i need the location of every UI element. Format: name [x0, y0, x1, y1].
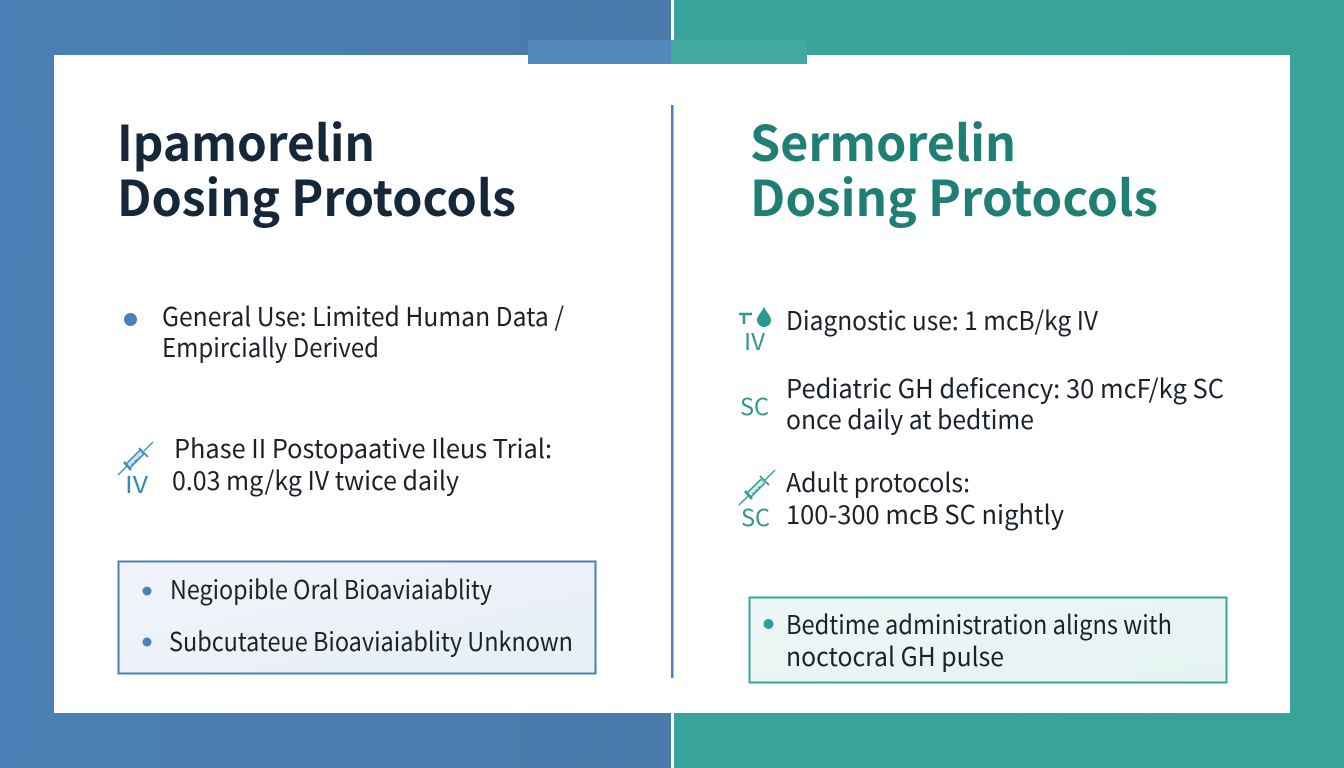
icon: IV drip and drop: IV: [744, 323, 766, 357]
item: diagnostic use: Diagnostic use: 1 mcB/kg IV: [786, 301, 1098, 338]
heading: Ipamorelin: Ipamorelin: [117, 105, 375, 176]
icon: SC label: SC: [740, 388, 769, 422]
item: Phase II trial: [172, 429, 552, 498]
heading: Sermorelin: Dosing Protocols: [750, 160, 1158, 231]
item: general use: Empircially Derived: [162, 328, 379, 365]
heading: Sermorelin: [750, 105, 1158, 231]
callout: bioavailability: Negiopible Oral Bioaviaiablity: [170, 570, 492, 607]
icon: IV drip and drop: [739, 307, 771, 357]
item: general use: [124, 297, 564, 365]
heading: Ipamorelin: [117, 105, 516, 231]
panel: Ipamorelin: [117, 105, 596, 674]
item: pediatric GH deficiency: Pediatric GH deficency: 30 mcF/kg SC: [786, 369, 1224, 406]
icon: syringe SC: [739, 470, 775, 533]
item: adult protocols: [786, 463, 1064, 532]
panel: Sermorelin: [739, 105, 1226, 682]
heading: Sermorelin: Sermorelin: [750, 105, 1016, 176]
callout: bioavailability: [118, 562, 596, 674]
panel: white card: [54, 55, 1290, 713]
item: Phase II trial: Phase II Postopaative Ileus Trial:: [174, 429, 552, 466]
item: adult protocols: 100-300 mcB SC nightly: [786, 495, 1064, 532]
icon: syringe IV: IV: [125, 466, 149, 500]
center divider: [671, 105, 674, 678]
item: general use: General Use: Limited Human Data /: [162, 297, 564, 334]
callout: bioavailability: Subcutateue Bioaviaiablity Unknown: [169, 622, 573, 659]
item: adult protocols: Adult protocols:: [786, 463, 970, 500]
callout: bedtime administration: Bedtime administration aligns with: [786, 605, 1172, 642]
heading: Ipamorelin: Dosing Protocols: [117, 160, 516, 231]
callout: bedtime administration: noctocral GH pulse: [786, 637, 1004, 674]
item: pediatric GH deficiency: [786, 369, 1224, 437]
top tab: [528, 40, 807, 64]
callout: bedtime administration: [750, 598, 1226, 682]
item: Phase II trial: 0.03 mg/kg IV twice daily: [172, 461, 459, 498]
icon: syringe SC: SC: [741, 499, 770, 533]
item: pediatric GH deficiency: once daily at bedtime: [786, 400, 1034, 437]
icon: syringe IV: [118, 442, 153, 500]
